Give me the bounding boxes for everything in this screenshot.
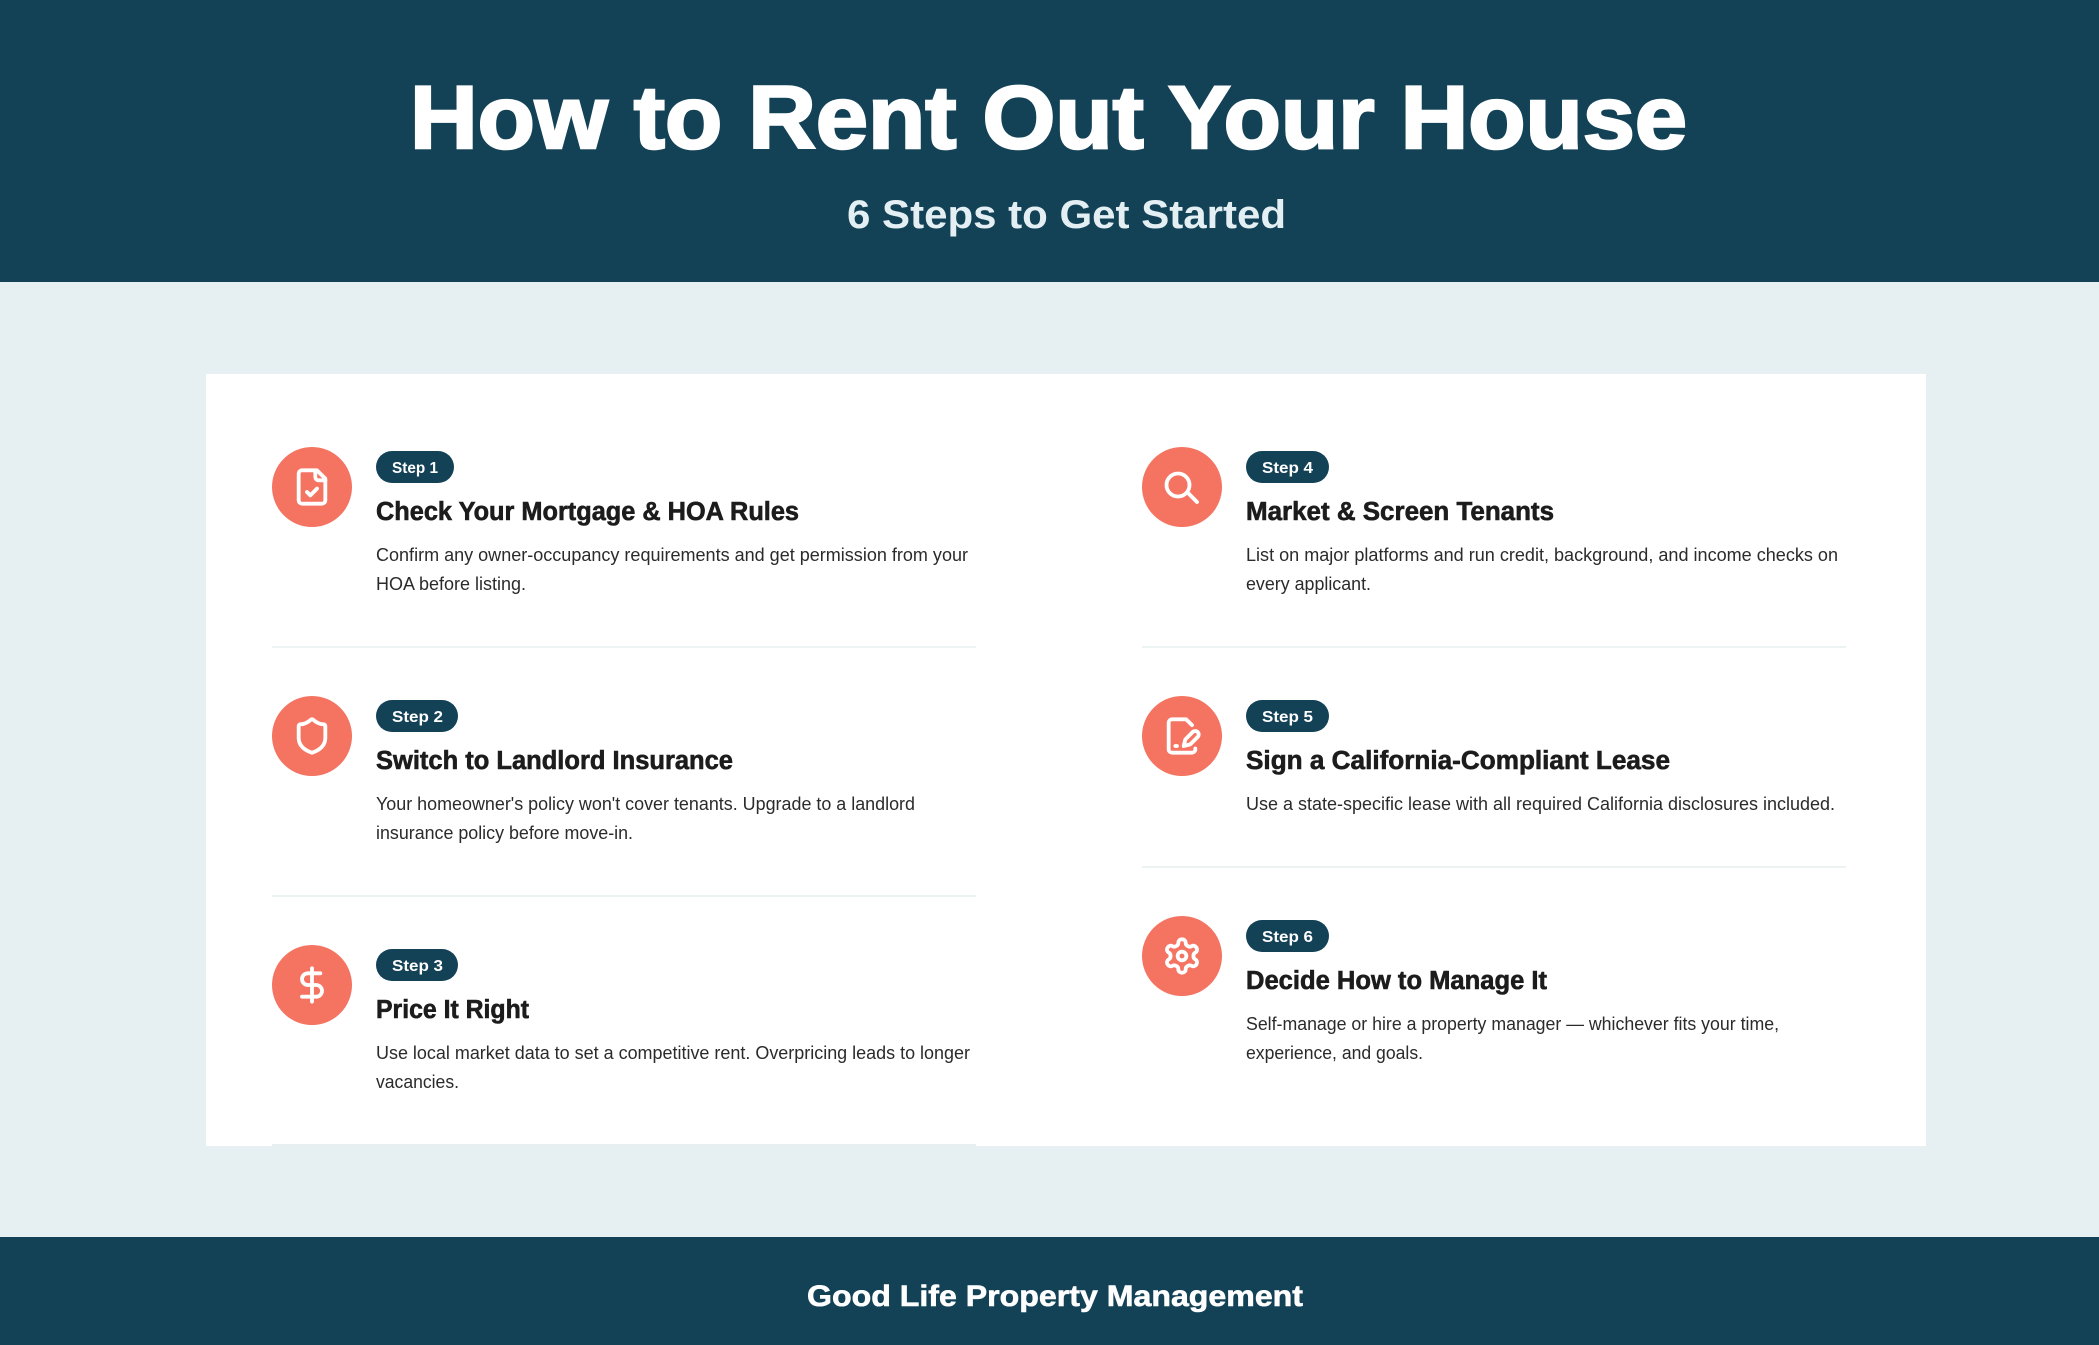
description: step 4 [1246,545,1838,594]
badge: step 5 [1246,700,1329,732]
header banner [0,0,2099,282]
panel: steps card [206,374,1926,1146]
footer brand name: Good Life Property Management [807,1280,1303,1313]
description: step 3: vacancies. [376,1072,459,1092]
description: step 6 [1246,1014,1779,1063]
heading: step 3: Price It Right [376,996,529,1024]
heading: step 1: Check Your Mortgage & HOA Rules [376,498,799,526]
badge: step 5: Step 5 [1262,709,1313,726]
description: step 4: List on major platforms and run credit, background, and income checks on [1246,545,1838,565]
badge: step 4: Step 4 [1262,460,1313,477]
description: step 2: Your homeowner's policy won't cover tenants. Upgrade to a landlord [376,794,915,814]
description: step 5: Use a state-specific lease with all required California disclosures included. [1246,794,1835,814]
icon: magnifying glass [1142,447,1222,527]
badge: step 2 [376,700,458,732]
description: step 2 [376,794,915,843]
heading: step 5: Sign a California-Compliant Lease [1246,747,1670,775]
badge: step 6: Step 6 [1262,929,1313,946]
description: step 2: insurance policy before move-in. [376,823,633,843]
badge: step 3: Step 3 [392,958,443,975]
icon: dollar sign [272,945,352,1025]
description: step 1: Confirm any owner-occupancy requirements and get permission from your [376,545,968,565]
icon: lease document with pen [1142,696,1222,776]
footer banner [0,1237,2099,1345]
heading: step 2: Switch to Landlord Insurance [376,747,733,775]
step 6 [1142,916,1779,1063]
step 3 [272,945,970,1092]
heading: step 6: Decide How to Manage It [1246,967,1548,995]
step 2 [272,696,915,843]
icon: gear [1142,916,1222,996]
description: step 1: HOA before listing. [376,574,526,594]
description: step 3 [376,1043,970,1092]
subtitle: 6 Steps to Get Started [847,193,1286,237]
title: How to Rent Out Your House [410,67,1687,167]
badge: step 3 [376,949,458,981]
step 5 [1142,696,1835,814]
description: step 3: Use local market data to set a competitive rent. Overpricing leads to longer [376,1043,970,1063]
description: step 6: Self-manage or hire a property manager — whichever fits your time, [1246,1014,1779,1034]
badge: step 1: Step 1 [392,460,438,477]
badge: step 1 [376,451,454,483]
badge: step 4 [1246,451,1329,483]
description: step 6: experience, and goals. [1246,1043,1423,1063]
description: step 1 [376,545,968,594]
step 4 [1142,447,1838,594]
icon: shield [272,696,352,776]
badge: step 6 [1246,920,1329,952]
description: step 4: every applicant. [1246,574,1371,594]
badge: step 2: Step 2 [392,709,443,726]
icon: file with check mark [272,447,352,527]
step 1 [272,447,968,594]
heading: step 4: Market & Screen Tenants [1246,498,1554,526]
